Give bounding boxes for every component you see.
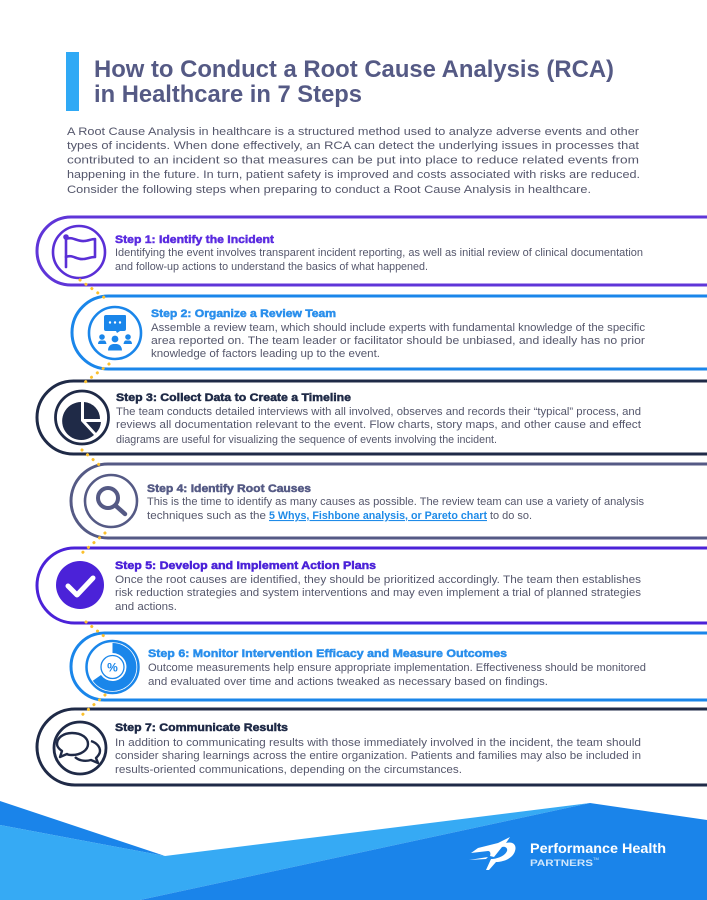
panel: step 1: Identifying the event involves transparent incident reporting, as well as initial review of clinical documentation: [115, 247, 643, 259]
panel: step 7: [37, 709, 707, 785]
logo wordmark: TM: [593, 856, 599, 861]
panel: step 5: [37, 548, 707, 623]
intro paragraph: types of incidents. When done effectively, an RCA can detect the underlying issues in processes that: [67, 140, 640, 152]
panel: step 7: Step 7: Communicate Results: [115, 722, 288, 734]
logo wordmark: PARTNERS: [530, 858, 593, 869]
icon: review team: [89, 307, 141, 359]
panel: step 4: techniques such as the: [147, 510, 266, 522]
panel: step 6: Outcome measurements help ensure appropriate implementation. Effectiveness should be monitored: [148, 662, 646, 674]
title: in Healthcare in 7 Steps: [94, 81, 362, 108]
panel: step 3: reviews all documentation relevant to the event. Flow charts, story maps, and other cause and effect: [116, 419, 641, 431]
panel: step 5: Once the root causes are identified, they should be prioritized accordingly. The team then establishes: [115, 574, 642, 586]
panel: step 3: The team conducts detailed interviews with all involved, observes and records their “typical” process, and: [116, 406, 641, 418]
panel: step 2: knowledge of factors leading up to the event.: [151, 348, 380, 360]
panel: step 3: diagrams are useful for visualizing the sequence of events involving the incident.: [116, 434, 497, 446]
panel: step 5: and actions.: [115, 601, 177, 613]
panel: step 6: Step 6: Monitor Intervention Efficacy and Measure Outcomes: [148, 648, 507, 660]
icon: flag: [53, 226, 105, 278]
intro paragraph: [67, 126, 640, 196]
panel: step 2: Assemble a review team, which should include experts with fundamental knowledge of the specific: [151, 322, 646, 334]
footer band: [0, 801, 707, 900]
icon: percent gauge: %: [107, 660, 118, 674]
panel: step 4: Step 4: Identify Root Causes: [147, 483, 311, 495]
pill connectors: dotted gold lines: [80, 280, 109, 715]
panel: step 7: In addition to communicating results with those immediately involved in the incident, the team should: [115, 737, 641, 749]
panel: step 2: area reported on. The team leader or facilitator should be unbiased, and ideally has no prior: [151, 335, 645, 347]
icon: pie chart: [56, 391, 108, 444]
title: [94, 56, 614, 108]
panel: step 6: and evaluated over time and actions tweaked as necessary based on findings.: [148, 676, 548, 688]
logo wordmark: Performance Health: [530, 840, 666, 856]
panel: step 1: Step 1: Identify the Incident: [115, 234, 274, 246]
intro paragraph: contributed to an incident so that measures can be put into place to reduce related events from: [67, 154, 639, 166]
icon: check mark: [56, 561, 104, 609]
panel: step 1: and follow-up actions to understand the basics of what happened.: [115, 261, 428, 273]
panel: step 4: [71, 464, 707, 538]
link text: 5 Whys, Fishbone analysis, or Pareto chart: [269, 510, 487, 522]
icon: percent gauge: [86, 641, 138, 693]
panel: step 7: consider sharing learnings across the entire organization. Patients and families may also be included in: [115, 750, 641, 762]
panel: step 2: Step 2: Organize a Review Team: [151, 308, 336, 320]
icon: magnifying glass: [85, 475, 137, 527]
panel: step 7: results-oriented communications, depending on the circumstances.: [115, 764, 462, 776]
title accent bar: [66, 52, 79, 111]
intro paragraph: Consider the following steps when preparing to conduct a Root Cause Analysis in healthcare.: [67, 184, 591, 196]
logo mark: [469, 837, 516, 870]
panel: step 4: This is the time to identify as many causes as possible. The review team can use a variety of analysis: [147, 496, 645, 508]
title: How to Conduct a Root Cause Analysis (RCA): [94, 56, 614, 83]
panel: step 5: Step 5: Develop and Implement Action Plans: [115, 560, 376, 572]
panel: step 6: [71, 633, 707, 700]
panel: step 1: [37, 217, 707, 285]
intro paragraph: happening in the future. In turn, patient safety is improved and costs associated with risks are reduced.: [67, 169, 640, 181]
icon: speech bubbles: [54, 722, 106, 774]
panel: step 3: Step 3: Collect Data to Create a Timeline: [116, 392, 351, 404]
panel: step 4: to do so.: [490, 510, 532, 522]
logo wordmark: [530, 840, 666, 869]
intro paragraph: A Root Cause Analysis in healthcare is a structured method used to analyze adverse events and other: [67, 126, 639, 138]
panel: step 5: risk reduction strategies and system interventions and may even implement a trial of planned strategies: [115, 587, 642, 599]
panel: step 3: [37, 381, 707, 454]
panel: step 2: [72, 296, 707, 369]
